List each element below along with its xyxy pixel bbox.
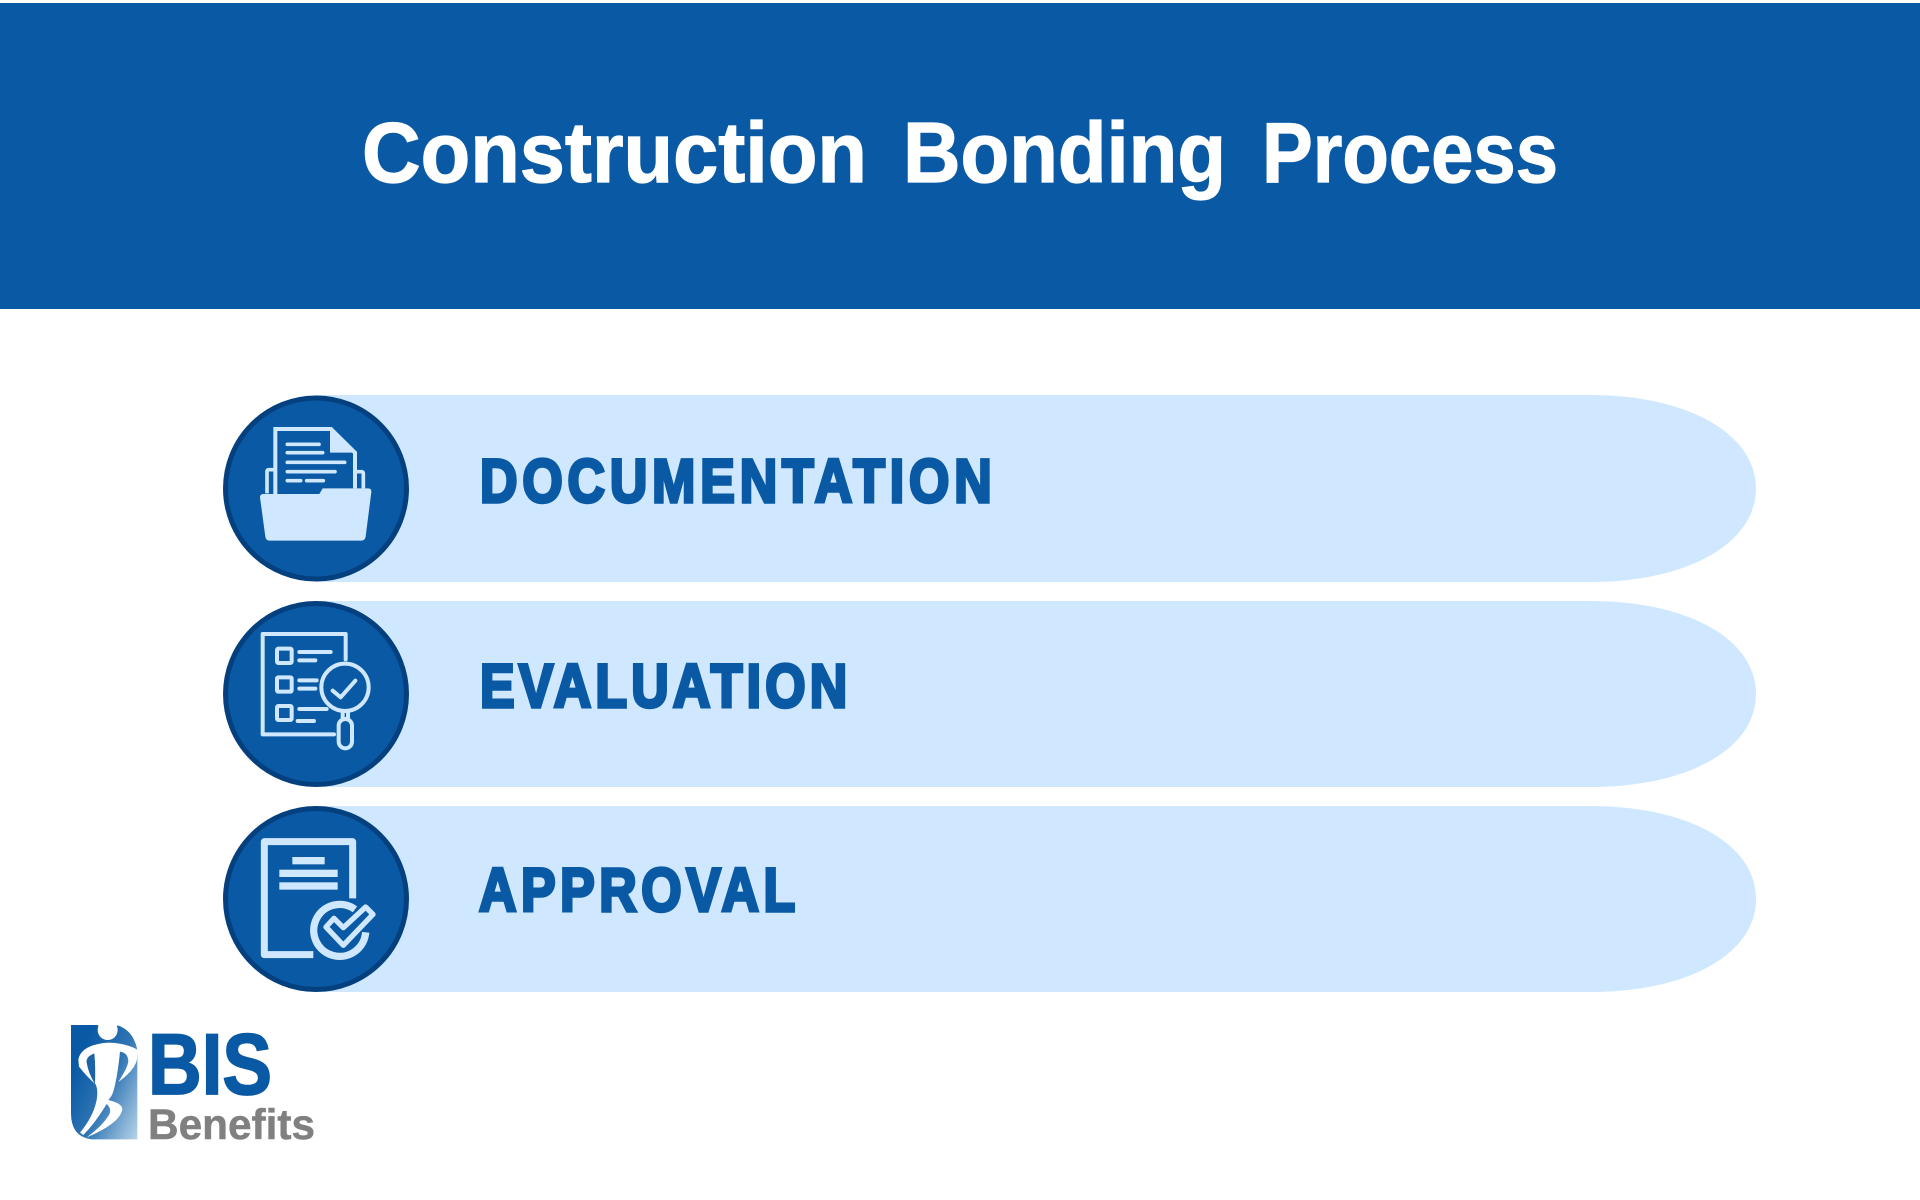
icon circle: evaluation	[226, 604, 406, 784]
title: Process	[1262, 106, 1558, 201]
panel: approval	[226, 806, 1756, 992]
evaluation bar	[316, 601, 1756, 787]
label: approval: APPROVAL	[479, 856, 795, 924]
icon: folder with document	[260, 428, 371, 541]
icon circle: approval	[226, 808, 406, 990]
logo wordmark: BIS: BIS	[148, 1017, 272, 1113]
icon circle: documentation	[226, 398, 406, 579]
logo: BIS Benefits	[71, 1017, 315, 1149]
title: Construction	[362, 106, 867, 201]
logo wordmark: Benefits: Benefits	[148, 1101, 315, 1149]
label: evaluation: EVALUATION	[480, 652, 847, 720]
header banner	[0, 3, 1920, 309]
panel: evaluation	[226, 601, 1756, 787]
approval bar	[316, 806, 1756, 992]
label: documentation: DOCUMENTATION	[480, 447, 992, 515]
title	[362, 106, 1558, 201]
icon: approved document	[264, 842, 373, 956]
panel: documentation	[226, 395, 1756, 582]
title: Bonding	[903, 106, 1226, 201]
icon: checklist with magnifier	[263, 634, 369, 748]
documentation bar	[316, 395, 1756, 582]
logo mark: runner shield	[71, 1020, 138, 1139]
